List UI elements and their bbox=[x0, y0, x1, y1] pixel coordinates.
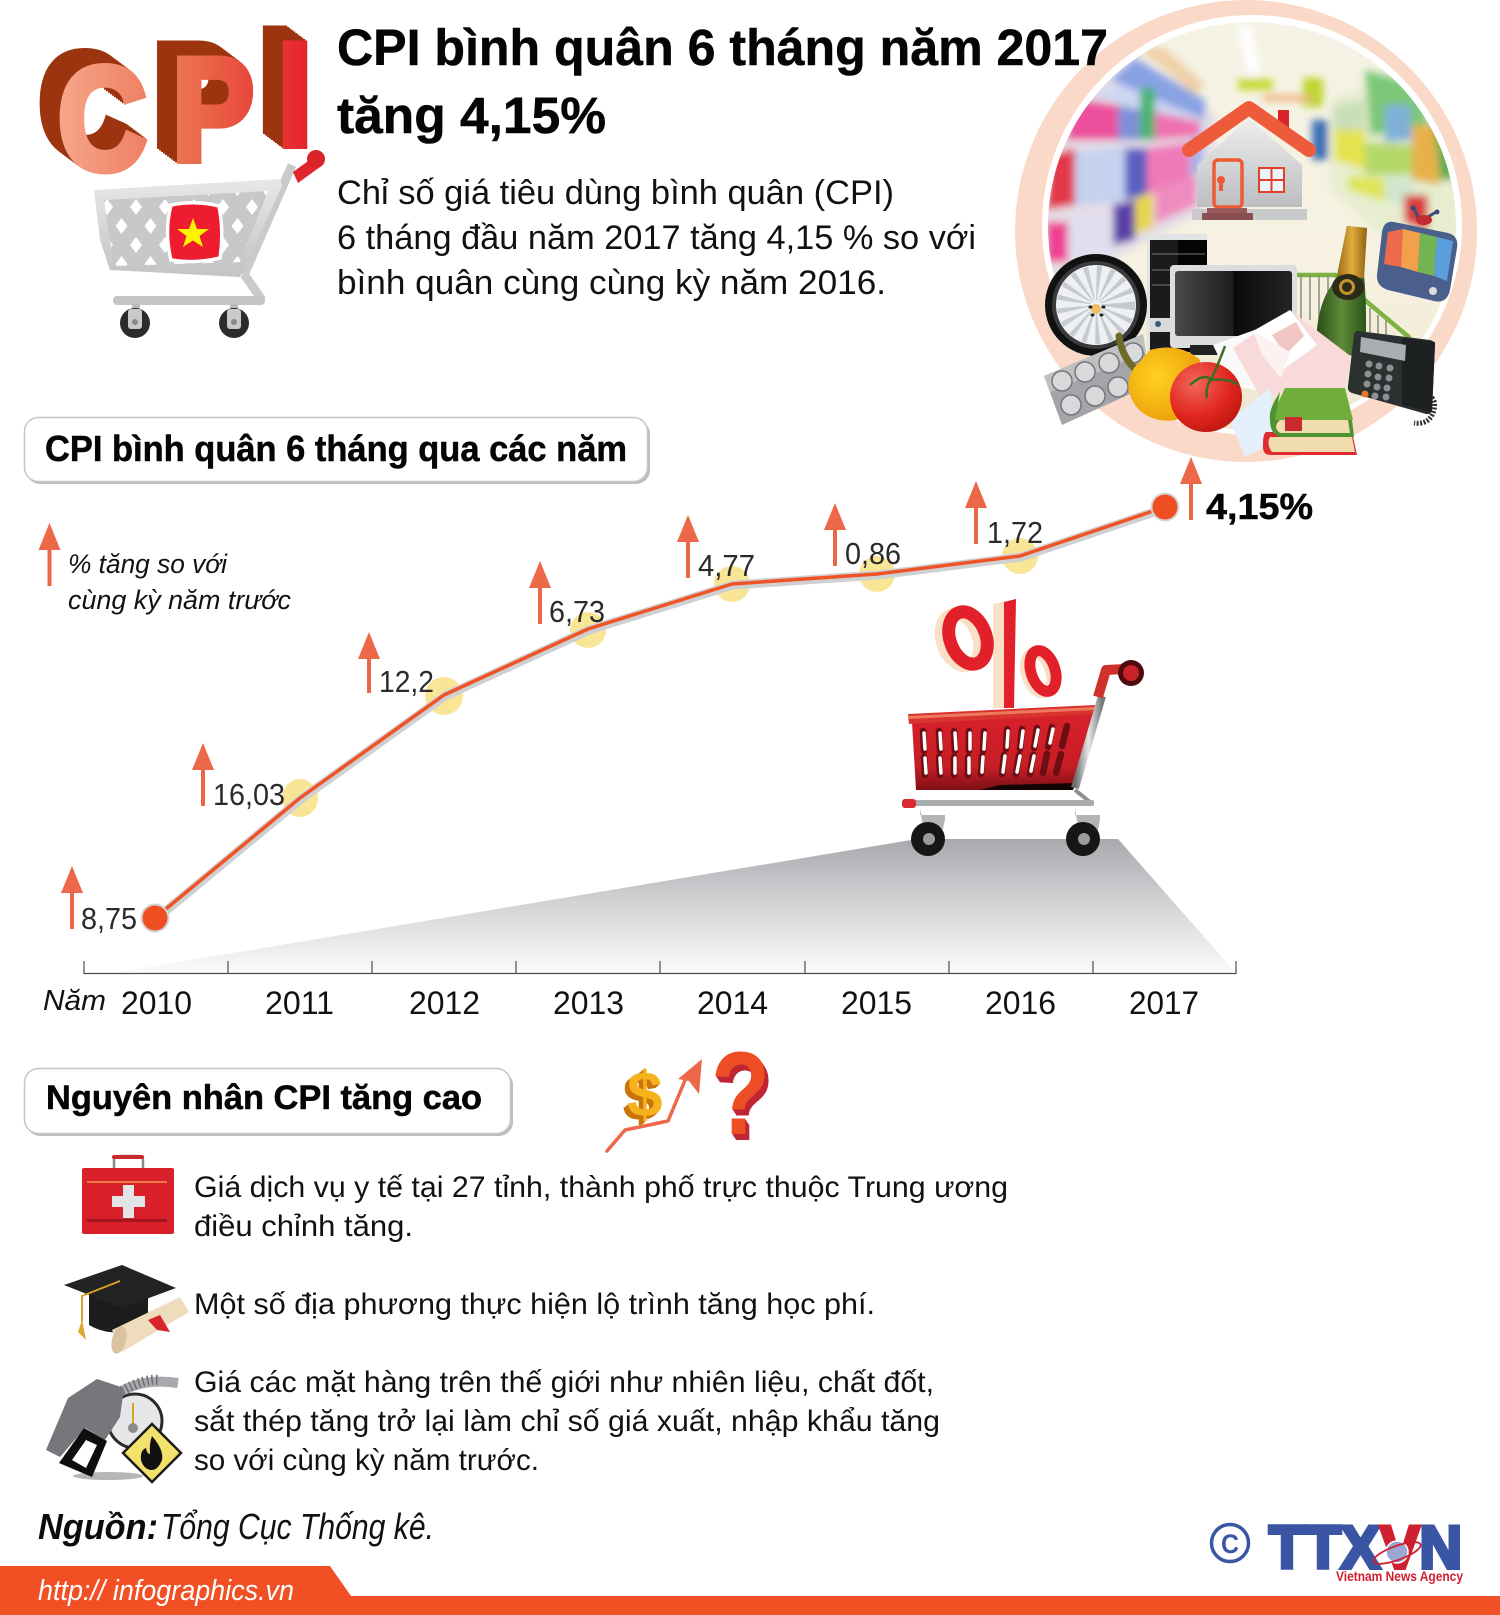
icon: house bbox=[1189, 108, 1309, 220]
x axis with years bbox=[43, 961, 1236, 1021]
cause 2 text: Một số địa phương thực hiện lộ trình tăng học phí. bbox=[194, 1288, 875, 1321]
icon: red cart with percent sign bbox=[902, 599, 1144, 856]
source line: Nguồn: bbox=[38, 1506, 158, 1547]
percent sign bbox=[934, 599, 1061, 708]
data values: 12,2 bbox=[379, 664, 434, 699]
heading pill: causes bbox=[24, 1068, 513, 1136]
icon: red first aid kit bbox=[82, 1155, 174, 1234]
x axis with years: 2013 bbox=[553, 985, 624, 1021]
data values: 16,03 bbox=[213, 777, 285, 812]
ramp: grey shadow under chart bbox=[113, 839, 1236, 973]
icon: green cart rail bbox=[1297, 275, 1410, 340]
footer band bbox=[0, 1566, 1500, 1615]
intro text: bình quân cùng cùng kỳ năm 2016. bbox=[337, 264, 886, 302]
cause 3 text bbox=[194, 1366, 940, 1477]
icon: alloy wheel tyre bbox=[1045, 254, 1147, 356]
flag on cart bbox=[168, 203, 222, 262]
grey line shadow bbox=[156, 508, 1166, 919]
icon: dollar, rising arrow, question mark: ? bbox=[711, 1027, 770, 1159]
start point bbox=[140, 904, 170, 932]
data values: 6,73 bbox=[549, 594, 605, 629]
highlight dots bbox=[282, 538, 1038, 817]
legend: arrow and explanation bbox=[38, 523, 291, 615]
cause 1 text: Giá dịch vụ y tế tại 27 tỉnh, thành phố trực thuộc Trung ương bbox=[194, 1171, 1008, 1204]
icon: computer tower bbox=[1147, 234, 1207, 352]
x axis with years: 2011 bbox=[265, 985, 334, 1021]
illustration: supermarket circle with goods bbox=[1015, 0, 1477, 462]
cause 3 text: Giá các mặt hàng trên thế giới như nhiên liệu, chất đốt, bbox=[194, 1366, 934, 1399]
legend: arrow and explanation: cùng kỳ năm trước bbox=[68, 585, 291, 615]
logo: TTXVN: Vietnam News Agency bbox=[1336, 1569, 1463, 1584]
cause 3 text: so với cùng kỳ năm trước. bbox=[194, 1444, 539, 1477]
title: CPI bình quân 6 tháng năm 2017 bbox=[337, 19, 1108, 76]
source line bbox=[38, 1506, 434, 1547]
data values: 4,15% bbox=[1206, 486, 1313, 527]
intro text: 6 tháng đầu năm 2017 tăng 4,15 % so với bbox=[337, 219, 976, 257]
icon: champagne bottle bbox=[1316, 226, 1367, 360]
icon: silver shopping cart with Vietnam flag bbox=[94, 150, 325, 338]
footer url: http:// infographics.vn bbox=[38, 1575, 294, 1607]
icon: dollar, rising arrow, question mark bbox=[607, 1027, 770, 1159]
x axis with years: 2015 bbox=[841, 985, 912, 1021]
basket slots bbox=[923, 726, 1067, 775]
icon: white and pink shirts bbox=[1213, 310, 1353, 457]
data values: 1,72 bbox=[987, 515, 1043, 550]
icon: television bbox=[1377, 206, 1457, 302]
heading pill: causes: Nguyên nhân CPI tăng cao bbox=[46, 1079, 482, 1117]
heading pill: CPI average over years: CPI bình quân 6 tháng qua các năm bbox=[45, 428, 627, 469]
icon: graduation cap and diploma bbox=[64, 1265, 189, 1355]
data values bbox=[81, 486, 1313, 936]
cause 1 text bbox=[194, 1171, 1008, 1243]
x axis with years: 2010 bbox=[121, 985, 192, 1021]
intro text bbox=[337, 174, 976, 302]
icon: tomato bbox=[1170, 346, 1242, 432]
icon: fuel pump nozzle with flammable sign bbox=[46, 1379, 181, 1482]
x axis with years: 2014 bbox=[697, 985, 768, 1021]
source line: Tổng Cục Thống kê. bbox=[161, 1506, 434, 1547]
icon: stacked books bbox=[1263, 388, 1357, 455]
copyright mark: C bbox=[1221, 1529, 1239, 1559]
x axis with years: 2016 bbox=[985, 985, 1056, 1021]
intro text: Chỉ số giá tiêu dùng bình quân (CPI) bbox=[337, 174, 894, 212]
cause 1 text: điều chỉnh tăng. bbox=[194, 1210, 413, 1243]
line chart: CPI by year bbox=[140, 492, 1180, 932]
arrows above data values bbox=[61, 457, 1202, 929]
icon: CPI 3D lettering: CPI bbox=[58, 13, 312, 200]
flammable sign bbox=[123, 1424, 181, 1482]
data values: 0,86 bbox=[845, 536, 901, 571]
legend: arrow and explanation: % tăng so với bbox=[68, 549, 228, 579]
frame and handle bbox=[1075, 696, 1102, 788]
icon: computer monitor bbox=[1170, 265, 1297, 355]
title bbox=[337, 19, 1108, 144]
end point bbox=[1150, 492, 1180, 522]
heading pill: CPI average over years bbox=[24, 418, 650, 484]
cause 3 text: sắt thép tăng trở lại làm chỉ số giá xuất, nhập khẩu tăng bbox=[194, 1405, 940, 1438]
icon: desk telephone bbox=[1348, 331, 1435, 423]
icon: pill blister pack bbox=[1044, 334, 1150, 425]
orange line bbox=[155, 507, 1165, 918]
icon: yellow bell pepper bbox=[1119, 336, 1200, 421]
blurred supermarket photo bbox=[1040, 15, 1465, 440]
icon: dollar, rising arrow, question mark: $ bbox=[627, 1058, 663, 1130]
copyright mark bbox=[1212, 1524, 1248, 1562]
circle frame bbox=[1015, 0, 1477, 462]
x axis with years: Năm bbox=[43, 985, 106, 1017]
title: tăng 4,15% bbox=[337, 87, 606, 144]
x axis with years: 2017 bbox=[1129, 985, 1199, 1021]
data values: 8,75 bbox=[81, 901, 137, 936]
x axis with years: 2012 bbox=[409, 985, 480, 1021]
front and rear wheels bbox=[911, 808, 1100, 856]
data values: 4,77 bbox=[698, 548, 755, 583]
basket bbox=[912, 712, 1094, 790]
logo: TTXVN: TTXVN bbox=[1269, 1514, 1462, 1581]
